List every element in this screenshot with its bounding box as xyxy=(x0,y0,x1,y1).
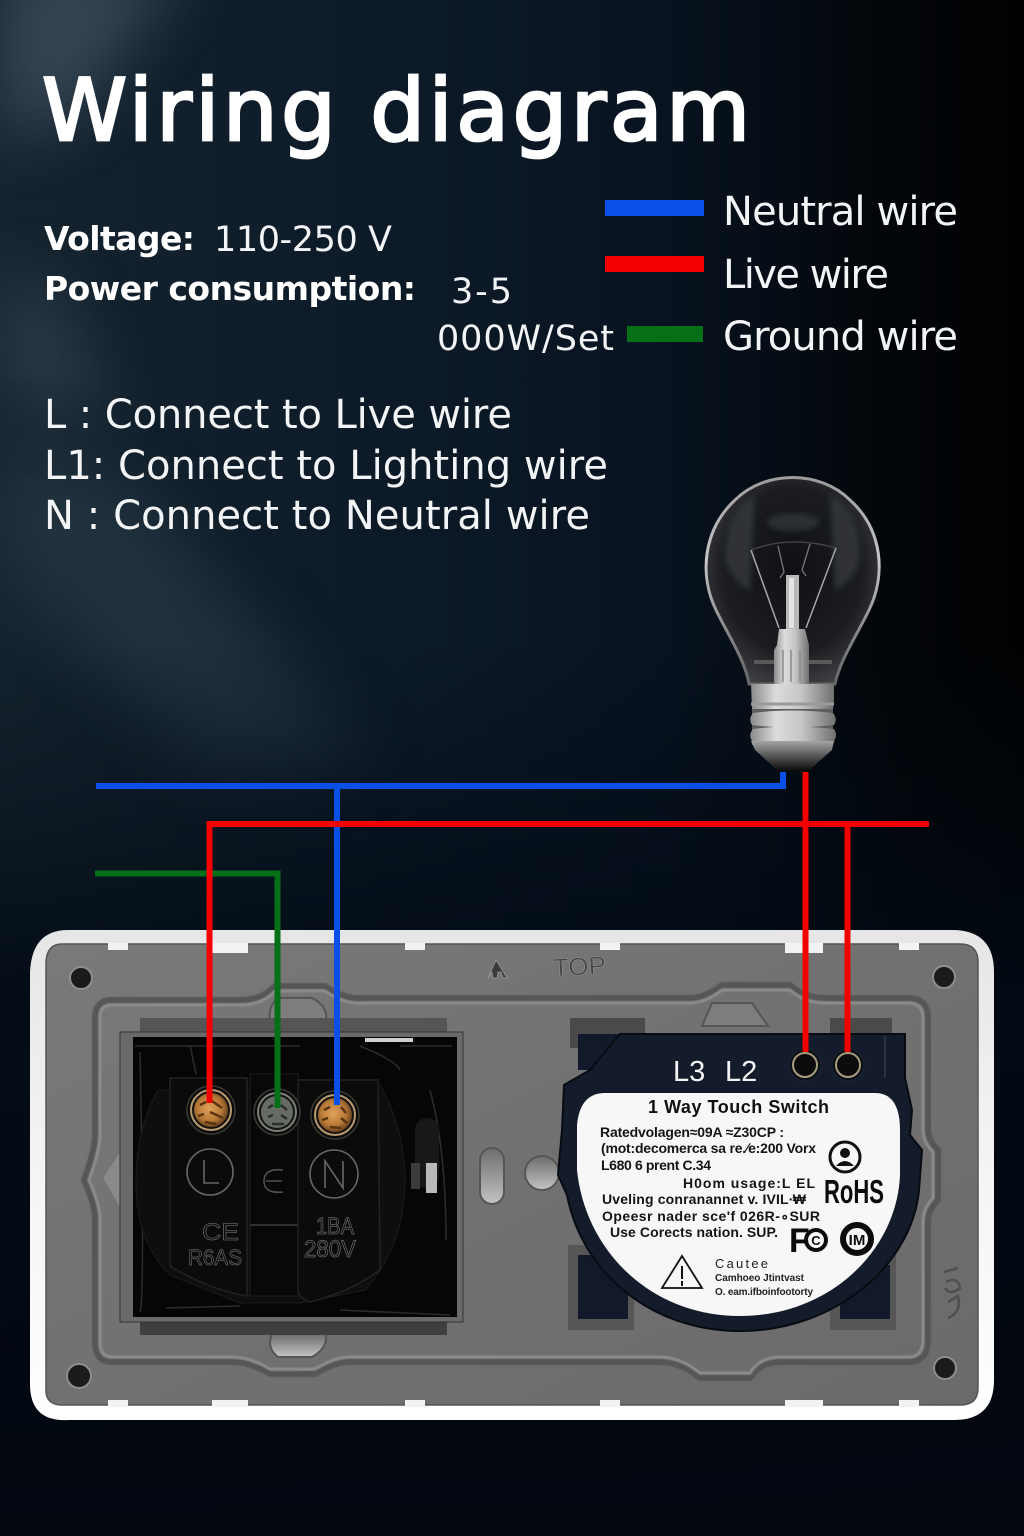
socket: top flanges xyxy=(140,1018,447,1034)
socket: middle panel xyxy=(250,1074,298,1296)
wire: neutral to socket xyxy=(334,786,340,1105)
switch: terminal names xyxy=(673,1056,757,1088)
plate: gray back xyxy=(46,944,978,1405)
voltage specification: 110-250 V xyxy=(214,220,392,260)
switch: dark body xyxy=(558,1034,922,1331)
switch: white label xyxy=(577,1093,900,1316)
legend: ground wire: Ground wire xyxy=(723,314,958,360)
terminal descriptions: N : Connect to Neutral wire xyxy=(44,493,590,539)
voltage specification: Voltage: xyxy=(44,219,195,258)
switch: recess tabs xyxy=(568,1018,896,1330)
terminal: ground screw xyxy=(254,1089,300,1135)
plate: raised ridge xyxy=(84,985,938,1378)
socket: 18A marking: 1BA xyxy=(316,1213,354,1240)
icon: light bulb xyxy=(706,478,879,771)
terminal: live screw xyxy=(187,1086,235,1134)
plate: white frame xyxy=(30,930,994,1420)
socket: right panel xyxy=(298,1080,380,1302)
socket: black housing xyxy=(133,1037,457,1317)
power consumption specification: 000W/Set xyxy=(437,319,614,359)
switch: specification text: L680 6 prent C.34 xyxy=(601,1157,711,1173)
socket: 280V marking: 280V xyxy=(304,1236,356,1263)
switch: caution text: O. eam.ifboinfootorty xyxy=(715,1287,813,1298)
touch switch module xyxy=(558,1018,922,1331)
icon: RoHS mark: RoHS xyxy=(824,1173,884,1210)
socket: round body xyxy=(136,1085,405,1303)
switch: specification text: Use Corects nation. SUP. xyxy=(610,1224,778,1240)
wire: neutral to bulb xyxy=(96,772,783,786)
plate: screw holes xyxy=(67,966,956,1388)
legend: live wire: Live wire xyxy=(723,252,889,298)
switch: caution text: Camhoeo Jtintvast xyxy=(715,1273,805,1284)
switch: specification text: Opeesr nader sce'f 026R-∘SUR xyxy=(602,1208,820,1224)
plate: TOP marking: TOP xyxy=(552,952,607,982)
plate: center openings xyxy=(103,998,768,1357)
icon: IM mark: IM xyxy=(849,1232,865,1249)
socket: N marking xyxy=(310,1150,358,1198)
switch: terminal L2 xyxy=(832,1049,864,1081)
switch: product name: 1 Way Touch Switch xyxy=(648,1097,829,1117)
switch: specification text: H0om usage:L EL xyxy=(683,1175,815,1191)
power consumption specification xyxy=(44,269,614,359)
socket: E marking xyxy=(264,1170,283,1192)
wires xyxy=(95,772,929,1108)
socket: bottom flange xyxy=(140,1318,447,1335)
socket: recess frame xyxy=(120,1032,463,1322)
switch: terminal names: L2 xyxy=(725,1056,757,1088)
socket: left panel xyxy=(170,1078,247,1296)
voltage specification xyxy=(44,219,392,260)
legend xyxy=(605,189,958,360)
icon: caution triangle xyxy=(662,1256,702,1288)
icon: FC mark xyxy=(789,1222,826,1260)
plate: lock mark xyxy=(488,960,507,978)
terminal descriptions xyxy=(44,392,608,539)
terminal: neutral screw xyxy=(311,1091,359,1139)
socket module xyxy=(120,1018,463,1335)
switch: specification text: (mot:decomerca sa re.∕e:200 Vorx xyxy=(601,1140,816,1156)
plate: clips xyxy=(108,943,919,1407)
legend: neutral wire xyxy=(605,189,958,235)
socket: CE marking: CE xyxy=(202,1219,239,1246)
icon: FC mark: C xyxy=(811,1233,821,1248)
switch: specification text: Ratedvolagen≈09A ≈Z30CP : xyxy=(600,1124,784,1140)
terminal descriptions: L : Connect to Live wire xyxy=(44,392,512,438)
socket: L marking xyxy=(187,1149,233,1195)
switch: caution text: Cautee xyxy=(715,1256,768,1271)
switch: caution text xyxy=(715,1256,813,1298)
wall plate xyxy=(30,930,994,1420)
legend: live wire xyxy=(605,252,889,298)
power consumption specification: Power consumption: xyxy=(44,269,416,308)
wire: bulb to L3 xyxy=(802,772,808,1052)
socket: slot and metal contact xyxy=(411,1118,439,1193)
wire: ground xyxy=(95,874,278,1108)
terminal descriptions: L1: Connect to Lighting wire xyxy=(44,443,608,489)
socket: R6AS marking: R6AS xyxy=(188,1245,242,1270)
switch: terminal names: L3 xyxy=(673,1056,705,1088)
title: Wiring diagram xyxy=(42,61,750,161)
wire: live to L2 xyxy=(844,824,850,1052)
switch: specification text: Uveling conranannet v. IVIL∙₩ xyxy=(602,1191,807,1207)
switch: terminal L3 xyxy=(789,1049,821,1081)
icon: person certification mark xyxy=(830,1142,860,1172)
icon: IM mark xyxy=(843,1225,871,1253)
icon: FC mark: F xyxy=(789,1222,810,1260)
plate: side marking xyxy=(944,1268,960,1318)
wire: live main xyxy=(210,824,929,1103)
legend: neutral wire: Neutral wire xyxy=(723,189,958,235)
switch: specification text xyxy=(600,1124,820,1240)
power consumption specification: 3-5 xyxy=(451,272,512,312)
